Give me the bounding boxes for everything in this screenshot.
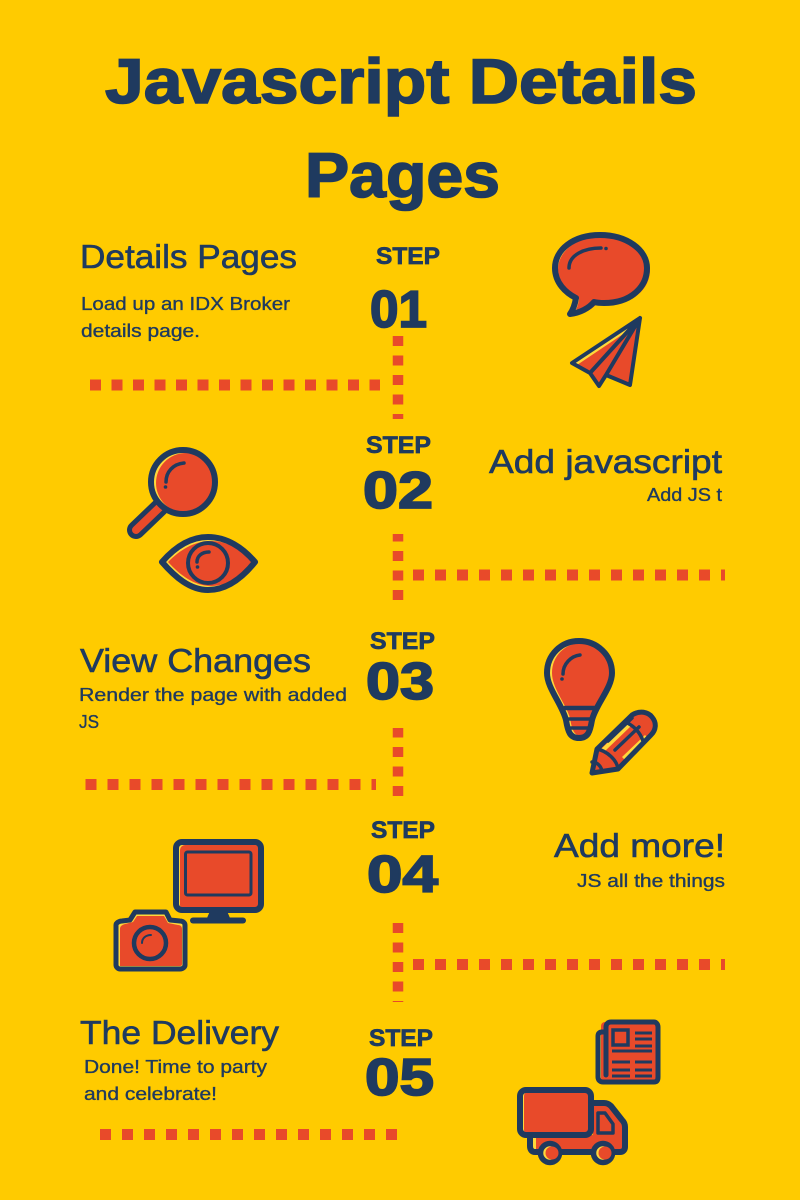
step 5 label: 05 bbox=[365, 1049, 434, 1107]
step 2 text: Add javascript: Add javascript bbox=[489, 443, 722, 480]
step 1 connector bbox=[90, 336, 398, 419]
step 1 text: Details Pages: Details Pages bbox=[80, 238, 297, 275]
step 5 text: The Delivery: Done! Time to party bbox=[84, 1057, 267, 1077]
step 3 label: STEP bbox=[370, 628, 435, 655]
step 1 label: STEP bbox=[376, 243, 440, 270]
step 1 text: Details Pages: details page. bbox=[81, 321, 200, 341]
icon: magnifying glass bbox=[136, 450, 216, 530]
title bbox=[105, 47, 697, 211]
step 1 text: Details Pages: Load up an IDX Broker bbox=[81, 294, 290, 314]
step 2 label bbox=[363, 432, 433, 520]
step 3 label bbox=[366, 628, 435, 711]
step 3 connector bbox=[86, 728, 398, 796]
step 1 text: Details Pages bbox=[80, 238, 297, 341]
step 3 text: View Changes: View Changes bbox=[80, 642, 311, 679]
step 5 text: The Delivery: and celebrate! bbox=[84, 1084, 217, 1104]
step 2 text: Add javascript bbox=[489, 443, 722, 505]
step 1 label bbox=[370, 243, 440, 339]
icon: paper plane bbox=[572, 318, 640, 386]
icon: pencil bbox=[592, 712, 655, 773]
step 2 text: Add javascript: Add JS t bbox=[647, 485, 722, 505]
step 5 connector bbox=[100, 1129, 397, 1140]
icon: delivery truck bbox=[520, 1090, 625, 1162]
step 4 label: STEP bbox=[371, 817, 435, 844]
icon: monitor bbox=[176, 842, 261, 920]
step 3 label: 03 bbox=[366, 653, 434, 711]
step 2 label: 02 bbox=[363, 462, 433, 520]
step 4 connector bbox=[398, 923, 725, 1002]
icon: newspaper bbox=[598, 1022, 658, 1082]
icon: eye bbox=[162, 537, 255, 590]
step 5 label bbox=[365, 1025, 434, 1107]
step 4 label bbox=[367, 817, 438, 904]
step 4 text: Add more! bbox=[554, 827, 725, 891]
step 4 label: 04 bbox=[367, 846, 438, 904]
step 3 text: View Changes: JS bbox=[79, 712, 99, 732]
step 3 text: View Changes bbox=[79, 642, 347, 732]
step 2 connector bbox=[398, 534, 725, 600]
step 4 text: Add more!: Add more! bbox=[554, 827, 725, 864]
step 5 text: The Delivery: The Delivery bbox=[80, 1014, 280, 1051]
icon: speech bubble bbox=[555, 235, 650, 316]
step 2 label: STEP bbox=[366, 432, 431, 459]
step 5 label: STEP bbox=[369, 1025, 433, 1052]
step 1 label: 01 bbox=[370, 281, 427, 339]
icon: light bulb bbox=[547, 641, 612, 738]
icon: camera bbox=[116, 912, 185, 969]
step 3 text: View Changes: Render the page with added bbox=[79, 685, 347, 705]
step 4 text: Add more!: JS all the things bbox=[577, 871, 725, 891]
title: Pages bbox=[305, 141, 500, 211]
title: Javascript Details bbox=[105, 47, 697, 117]
step 5 text: The Delivery bbox=[80, 1014, 280, 1104]
